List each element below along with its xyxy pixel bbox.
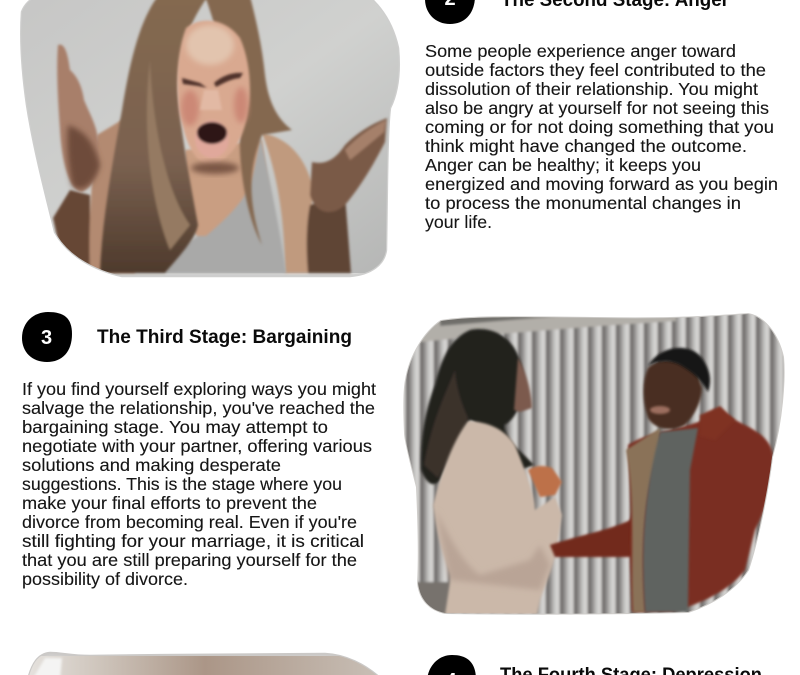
right hand [310, 118, 387, 212]
badge 3: 3 [41, 327, 52, 349]
text: second stage body: coming or for not doing something that you [425, 117, 774, 137]
step 4 block [427, 655, 762, 675]
badge 2 [425, 0, 475, 24]
text: third stage body: make your final efforts to prevent the [22, 493, 317, 513]
text: second stage body [425, 41, 778, 232]
text: third stage body [22, 379, 376, 589]
text: second stage body: to process the monumental changes in [425, 193, 741, 213]
man jacket sleeve [548, 516, 632, 559]
text: third stage body: If you find yourself exploring ways you might [22, 379, 376, 399]
window [32, 658, 62, 675]
text: second stage body: dissolution of their relationship. You might [425, 79, 758, 99]
heading: third stage: The Third Stage: Bargaining [97, 326, 352, 348]
text: third stage body: bargaining stage. You may attempt to [22, 417, 328, 437]
woman face edge [514, 358, 532, 412]
man shirt [643, 428, 698, 612]
man fleece collar [626, 428, 660, 612]
text: second stage body: outside factors they feel contributed to the [425, 60, 766, 80]
right shoulder and upper arm [262, 133, 312, 273]
step 3 block [22, 312, 376, 589]
photo: angry woman [15, 0, 405, 276]
left hand [57, 45, 99, 192]
nose [200, 90, 222, 110]
text: second stage body: Some people experience anger toward [425, 41, 736, 61]
badge 4 [427, 655, 476, 675]
tank top [165, 135, 286, 273]
step 2 block [425, 0, 778, 232]
corrugated wall [400, 310, 790, 620]
left upper arm [89, 115, 135, 273]
eyes and brows [182, 78, 207, 88]
text: third stage body: salvage the relationship, you've reached the [22, 398, 375, 418]
badge 3 [22, 312, 72, 362]
text: second stage body: think might have changed the outcome. [425, 136, 747, 156]
woman hair [421, 329, 534, 484]
woman hand [528, 466, 562, 497]
text: second stage body: Anger can be healthy; it keeps you [425, 155, 701, 175]
man jacket [628, 412, 773, 612]
mouth [195, 120, 229, 158]
photo: arguing couple [400, 310, 790, 620]
text: third stage body: still fighting for your marriage, it is critical [22, 531, 364, 551]
text: second stage body: your life. [425, 212, 492, 232]
text: third stage body: solutions and making desperate [22, 455, 281, 475]
text: second stage body: energized and moving forward as you begin [425, 174, 778, 194]
photo: room interior [25, 653, 385, 675]
text: second stage body: also be angry at yourself for not seeing this [425, 98, 769, 118]
man face [644, 360, 702, 429]
chest [184, 140, 266, 238]
hair [100, 0, 292, 273]
right forearm [307, 195, 351, 273]
text: third stage body: divorce from becoming real. Even if you're [22, 512, 357, 532]
text: third stage body: suggestions. This is the stage where you [22, 474, 342, 494]
text: third stage body: that you are still preparing yourself for the [22, 550, 357, 570]
text: third stage body: possibility of divorce. [22, 569, 188, 589]
woman sweater [433, 421, 562, 615]
text: third stage body: negotiate with your partner, offering various [22, 436, 372, 456]
face [177, 21, 250, 165]
left forearm [53, 190, 90, 273]
